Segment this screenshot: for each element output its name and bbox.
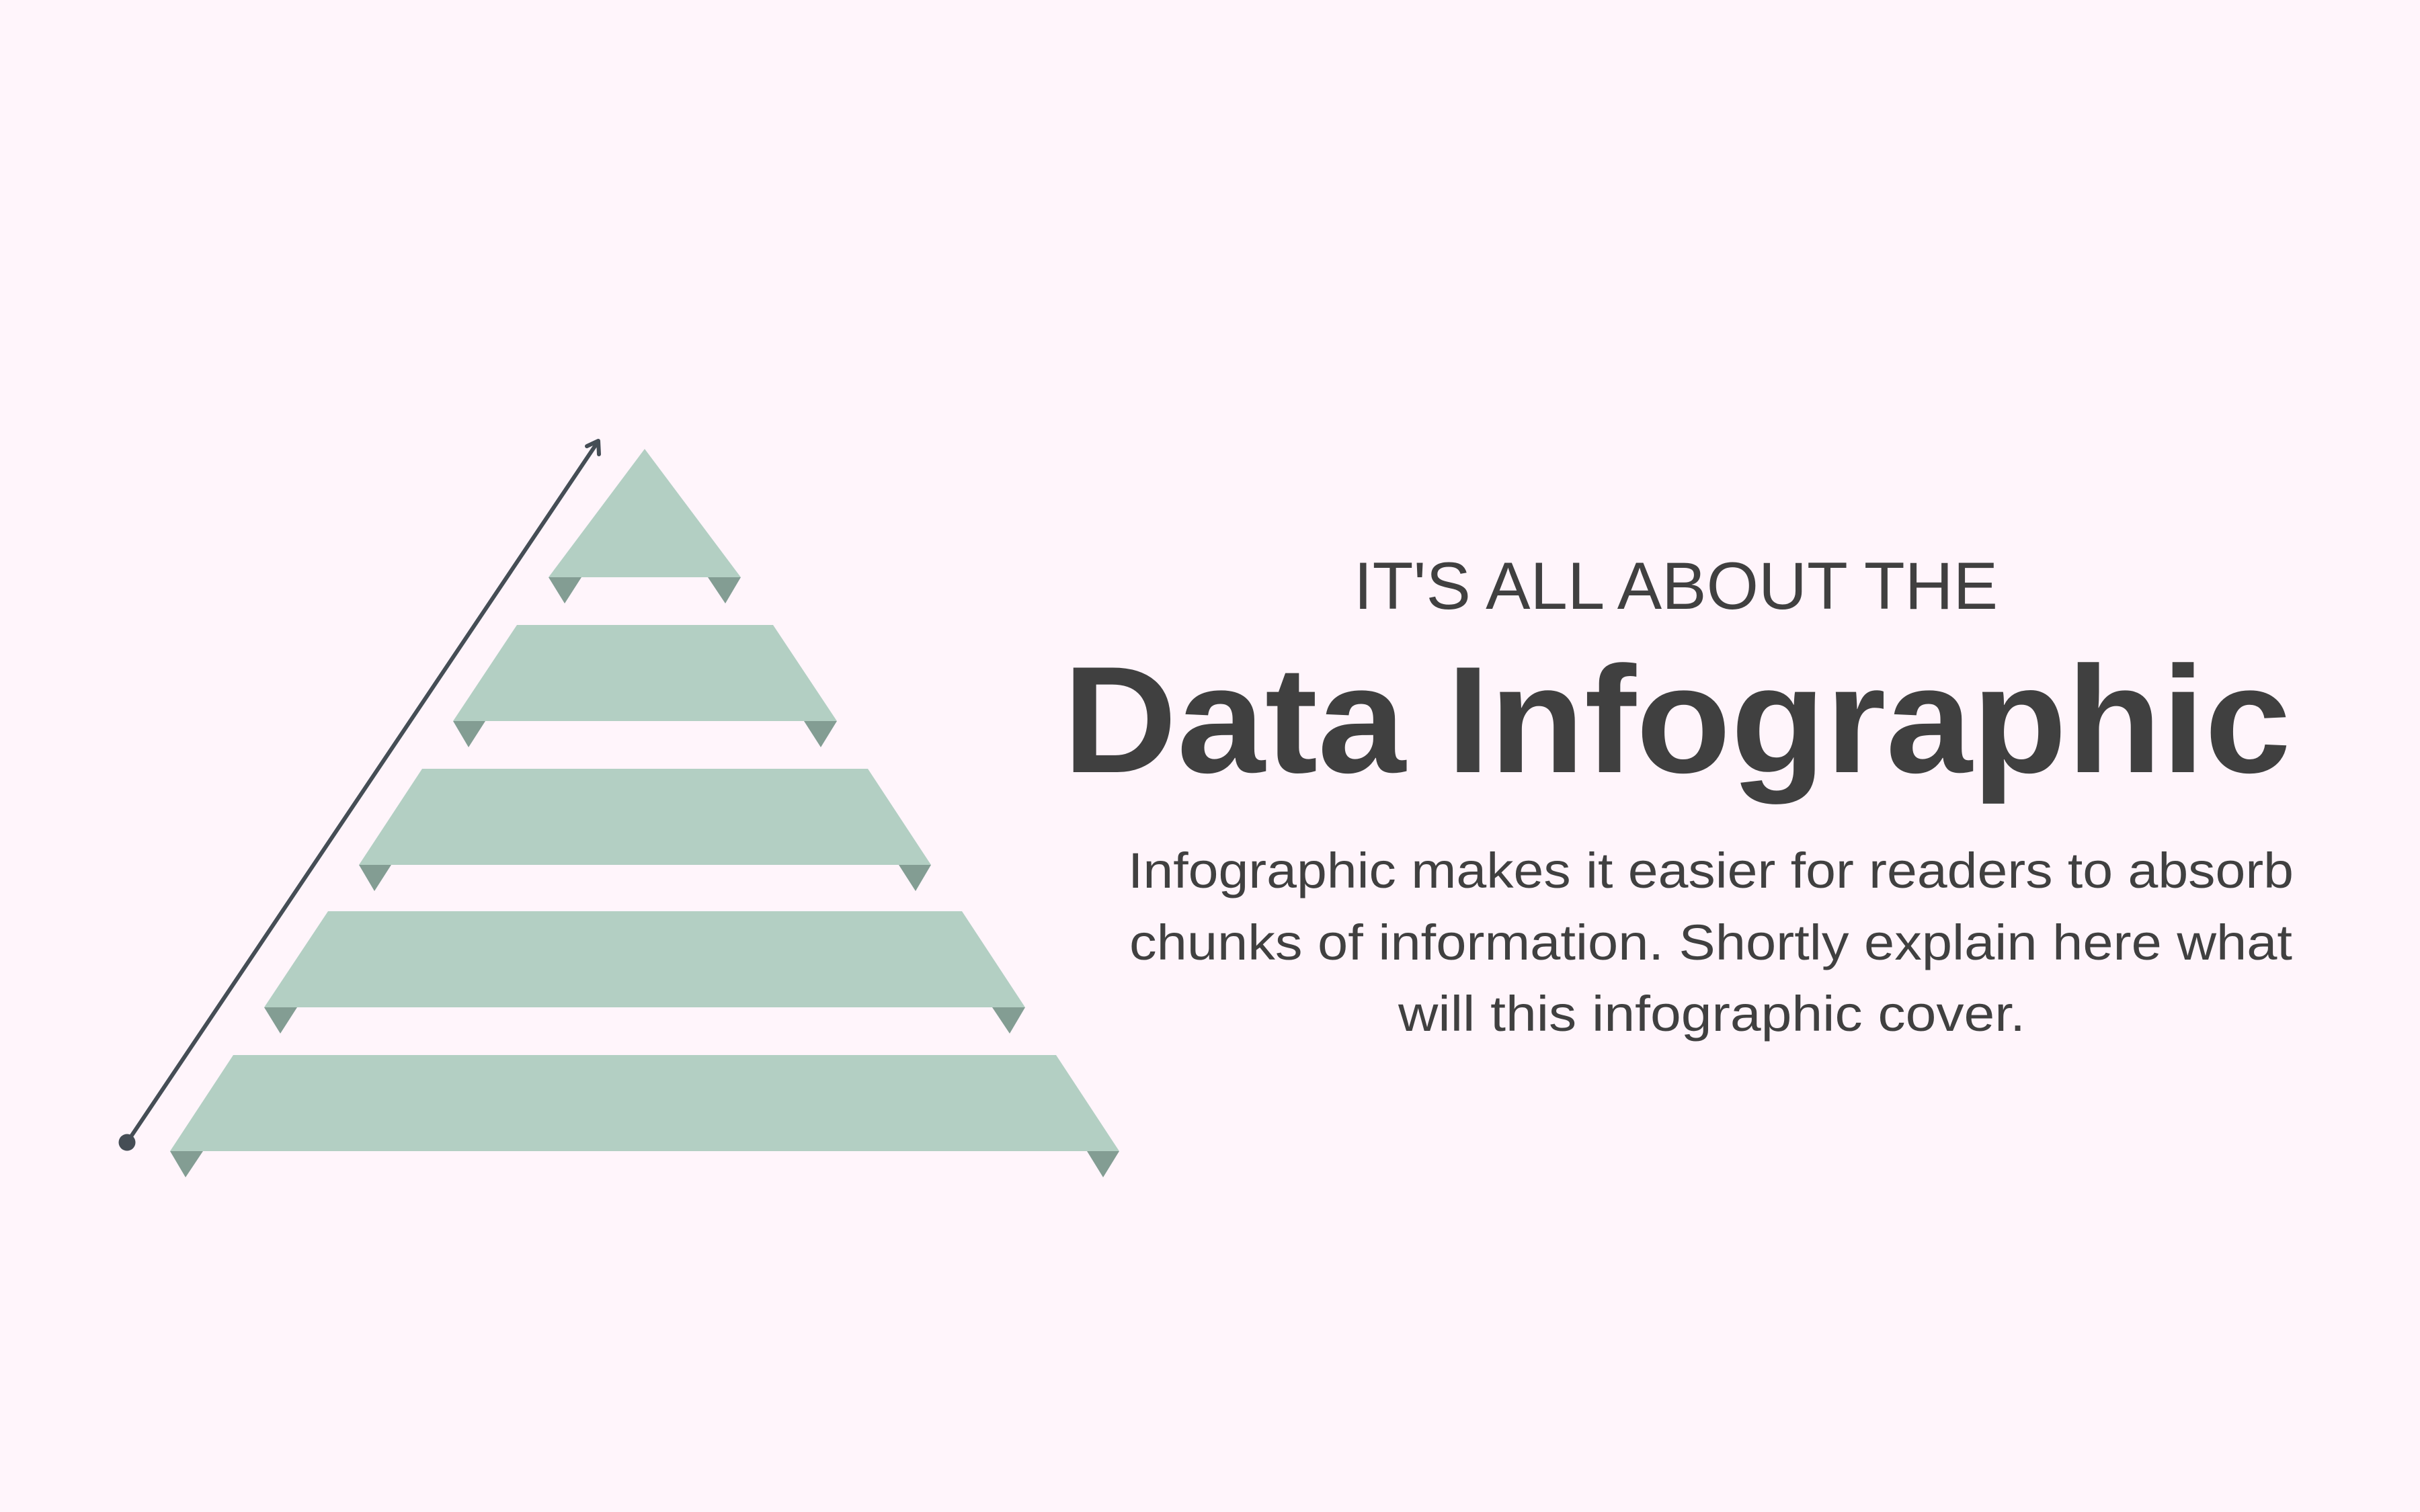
tier 5: base [170,1055,1119,1177]
tier 4 [264,911,1025,1034]
description text: will this infographic cover. [1398,986,2025,1042]
main title: Infographic [1447,634,2291,804]
growth arrow [118,441,599,1150]
description text: chunks of information. Shortly explain here what [1129,915,2292,970]
description text: Infographic makes it easier for readers to absorb [1128,843,2294,898]
tier 2 [453,625,837,747]
tier 3 [359,769,931,891]
main title: Data [1063,634,1407,804]
eyebrow heading: IT'S ALL ABOUT THE [1354,548,1998,623]
description text [1128,843,2294,1042]
main title [1063,634,2291,804]
tier 1: apex [549,449,741,603]
pyramid [170,449,1119,1177]
